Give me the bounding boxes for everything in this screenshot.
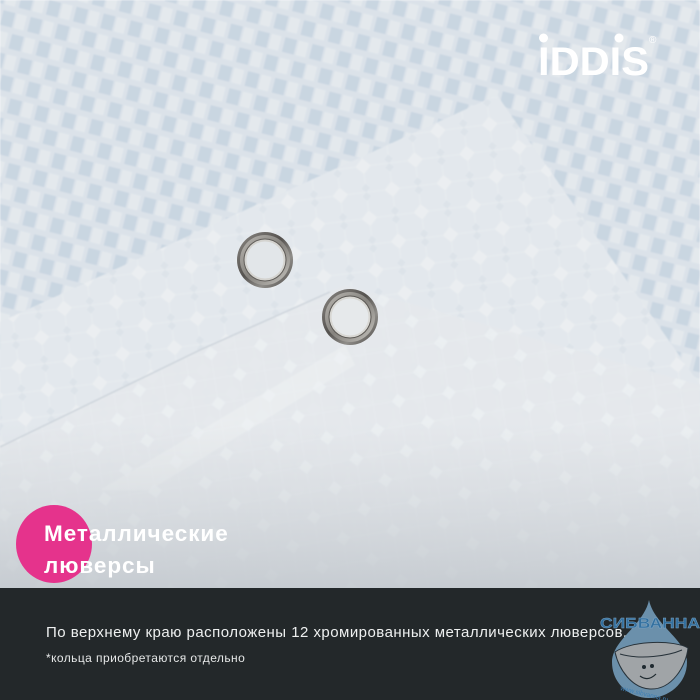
watermark: Sivvanna mascot (600, 600, 700, 700)
icon: water drop (612, 600, 687, 698)
heading: product feature: Металлические (44, 521, 229, 546)
panel: dark footer (0, 588, 700, 700)
logo: IDDIS: ® (649, 35, 657, 46)
heading: product feature (44, 521, 229, 578)
lower curtain layer (0, 285, 700, 588)
icon: smiling bathtub (615, 642, 688, 689)
text: description: По верхнему краю расположены 12 хромированных металлических люверсов. (46, 624, 628, 641)
logo: IDDIS: IDDIS (538, 40, 649, 83)
watermark title: СИБВАННА (600, 615, 700, 632)
icon: grommet left (237, 232, 293, 288)
pink circle behind heading (16, 505, 92, 583)
heading: product feature: люверсы (44, 553, 156, 578)
icon: grommet right (322, 289, 378, 345)
text: footnote: *кольца приобретаются отдельно (46, 651, 245, 665)
folded hem layer (0, 95, 700, 588)
